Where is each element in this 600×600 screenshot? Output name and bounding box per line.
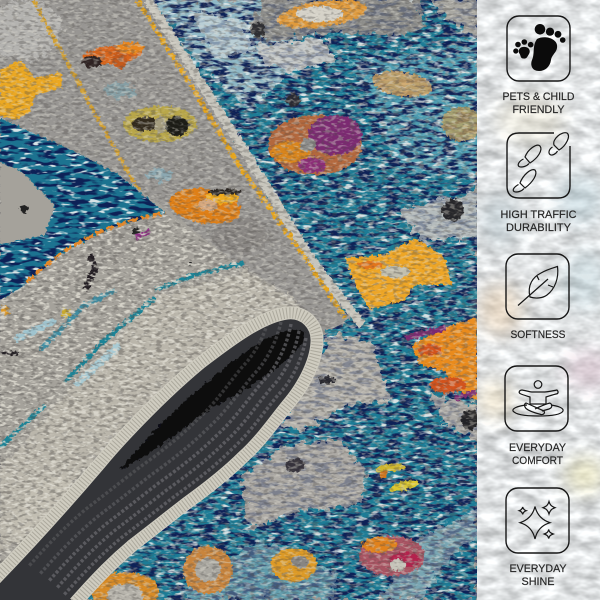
flower: yellow orange centre right	[345, 238, 452, 310]
feature: everyday shine	[506, 488, 569, 588]
flower: top cream and orange	[276, 0, 367, 30]
blue yarn texture light	[60, 0, 477, 600]
cream border stripe	[148, 0, 362, 325]
icon: paw and foot	[507, 16, 570, 81]
rug field: blue zones	[60, 0, 477, 600]
label: everyday shine: SHINE	[522, 576, 554, 588]
icon: footprints	[507, 133, 570, 198]
roll blue band yarn dark	[0, 118, 165, 300]
grey patches in blue field	[180, 0, 477, 600]
feature: everyday comfort	[505, 366, 568, 467]
icon: sparkles	[506, 488, 569, 553]
roll blue band	[0, 118, 165, 300]
flower: magenta	[268, 115, 362, 175]
roll orange line	[27, 213, 165, 282]
flower: amber left	[0, 60, 62, 120]
label: everyday shine	[510, 563, 567, 588]
roll blue band yarn light	[0, 118, 165, 300]
roll light patches	[0, 267, 300, 552]
label: softness: SOFTNESS	[510, 329, 566, 341]
label: pets and child friendly	[502, 91, 575, 116]
label: pets and child friendly: PETS & CHILD	[502, 91, 575, 103]
overall pile texture dark	[0, 0, 477, 600]
binding edge	[0, 313, 317, 600]
flower: orange bottom 2	[183, 546, 233, 594]
flower: yellow small	[375, 463, 420, 494]
label: high traffic durability: HIGH TRAFFIC	[500, 209, 577, 221]
feature: softness	[506, 254, 569, 341]
underside black shadow	[120, 330, 305, 470]
side panel	[477, 0, 600, 600]
roll dark flecks	[0, 205, 192, 354]
flower: orange bottom	[271, 548, 317, 582]
panel faded pattern	[477, 95, 600, 493]
label: everyday comfort: EVERYDAY	[509, 442, 567, 454]
grey field lighter patches	[0, 0, 270, 253]
flower: faded orange right	[442, 107, 482, 141]
label: everyday shine: EVERYDAY	[510, 563, 567, 575]
underside of rug	[0, 300, 324, 600]
flower: dark orange top	[81, 42, 144, 69]
roll body	[0, 120, 300, 564]
label: high traffic durability: DURABILITY	[506, 222, 572, 234]
feature: pets and child friendly	[502, 16, 575, 116]
feature: high traffic durability	[500, 133, 577, 234]
grey border inner line	[33, 0, 140, 193]
roll pile texture dark	[0, 213, 301, 564]
border line orange	[137, 0, 345, 318]
label: everyday comfort: COMFORT	[512, 455, 563, 467]
roll pile texture light	[0, 214, 299, 564]
flower: orange with dark edge	[168, 186, 242, 224]
label: everyday comfort	[509, 442, 567, 467]
flower: orange corner	[91, 572, 159, 600]
icon: meditation	[505, 366, 568, 431]
label: pets and child friendly: FRIENDLY	[512, 104, 565, 116]
dark spots	[251, 22, 479, 472]
roll teal streaks	[0, 263, 243, 447]
second pass of navy strands over the blue field	[118, 0, 477, 600]
label: high traffic durability	[500, 209, 577, 234]
flower: large orange right edge	[405, 317, 477, 400]
icon: feather	[506, 254, 569, 319]
flower: dark centre with yellow ring	[123, 106, 197, 142]
blue yarn texture dark	[60, 0, 477, 600]
overall pile texture light	[0, 0, 477, 600]
flower: faded orange	[372, 70, 432, 98]
flower: magenta bottom	[359, 536, 425, 576]
rolled rug corner	[0, 118, 324, 600]
underside knit rows	[28, 309, 306, 596]
